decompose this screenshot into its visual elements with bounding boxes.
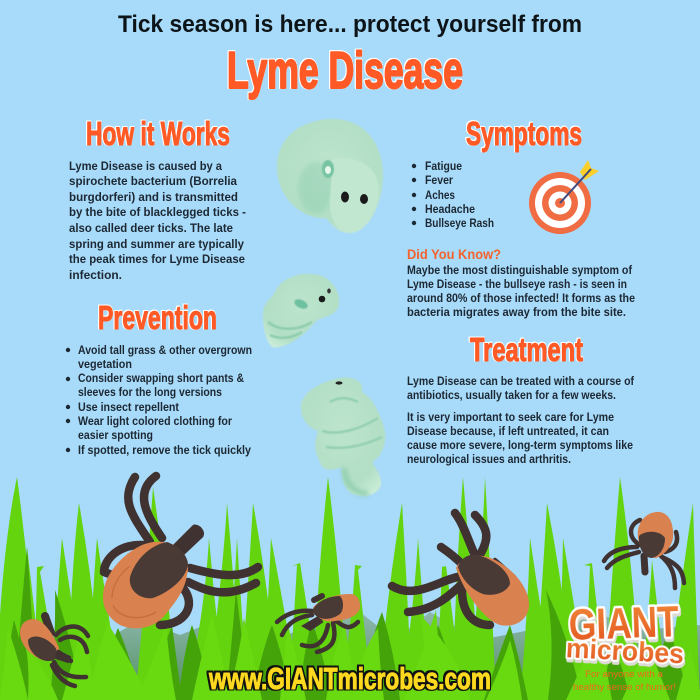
heading: did you know: Did You Know? [407,247,501,262]
list: prevention tips: Use insect repellent [78,401,179,414]
microbe: stretched spirochete [301,378,385,496]
list: symptoms: Fever [425,174,453,187]
text block: treatment: antibiotics, usually taken for a few weeks. [407,389,616,402]
list: prevention tips: vegetation [78,358,132,371]
grass: front blades [0,610,700,700]
text block: how it works: by the bite of blacklegged ticks - [69,206,246,219]
tagline: For anyone with a [585,668,664,679]
tick: upper right [604,512,684,588]
tick: large right [392,513,529,626]
heading: how it works: How it Works [86,115,230,152]
text block: treatment: cause more severe, long-term symptoms like [407,439,633,452]
text block: how it works: spring and summer are typically [69,238,245,251]
panel: did you know [407,247,636,319]
text block: how it works: also called deer ticks. The late [69,222,234,235]
text block: did you know: bacteria migrates away from the bite site. [407,306,626,319]
text block: how it works: Lyme Disease is caused by a [69,160,223,173]
list: prevention tips: Avoid tall grass & other overgrown [78,344,252,357]
tick: small lower left [20,616,88,686]
title: Tick season is here... protect yourself from [118,11,582,38]
panel: prevention [66,299,252,457]
list: prevention tips: Consider swapping short pants & [78,372,245,385]
list: prevention tips: If spotted, remove the tick quickly [78,444,252,457]
list: symptoms: Aches [425,189,455,202]
text block: how it works: the peak times for Lyme Disease [69,253,246,266]
microbe: large coiled spirochete [277,119,383,233]
list: symptoms: Fatigue [425,160,462,173]
text block: did you know: Maybe the most distinguishable symptom of [407,264,632,277]
heading: Lyme Disease: Lyme Disease [227,42,463,100]
tick: large upper left [103,476,258,628]
tick: centre bottom [277,594,360,652]
text block: treatment: Lyme Disease can be treated with a course of [407,375,634,388]
tagline [573,668,676,692]
text block: did you know: Lyme Disease - the bullseye rash - is seen in [407,278,627,291]
list: prevention tips: easier spotting [78,429,153,442]
heading: prevention: Prevention [98,299,217,336]
text block: did you know [407,264,636,319]
website url: www.GIANTmicrobes.com [208,661,491,696]
icon: bullseye target with arrow [529,160,599,234]
text block: how it works [69,160,246,282]
text block: treatment: Disease because, if left untreated, it can [407,425,609,438]
background hills [0,610,700,700]
list: prevention tips: Wear light colored clothing for [78,415,232,428]
text block: treatment: It is very important to seek care for Lyme [407,411,615,424]
heading: treatment: Treatment [470,331,583,368]
text block: treatment: neurological issues and arthritis. [407,453,571,466]
text block: how it works: spirochete bacterium (Borrelia [69,175,238,188]
panel: treatment [407,331,634,466]
logo: GIANT microbes: microbes [565,632,685,669]
text block: treatment [407,375,634,466]
grass: tall bright blades [0,477,700,700]
microbe: medium spirochete [263,274,339,347]
tagline: healthy sense of humor! [573,681,676,692]
grass: darker mid blades [2,547,690,700]
text block: did you know: around 80% of those infected! It forms as the [407,292,636,305]
list: symptoms: Headache [425,203,475,216]
text block: how it works: infection. [69,269,122,282]
panel: how it works [69,115,246,282]
list: prevention tips [66,344,252,457]
list: prevention tips: sleeves for the long versions [78,386,222,399]
logo: GIANT microbes [565,597,685,692]
panel: symptoms [412,115,599,234]
text block: how it works: burgdorferi) and is transmitted [69,191,238,204]
list: symptoms: Bullseye Rash [425,217,494,230]
list: symptoms [412,160,494,230]
heading: symptoms: Symptoms [466,115,582,152]
